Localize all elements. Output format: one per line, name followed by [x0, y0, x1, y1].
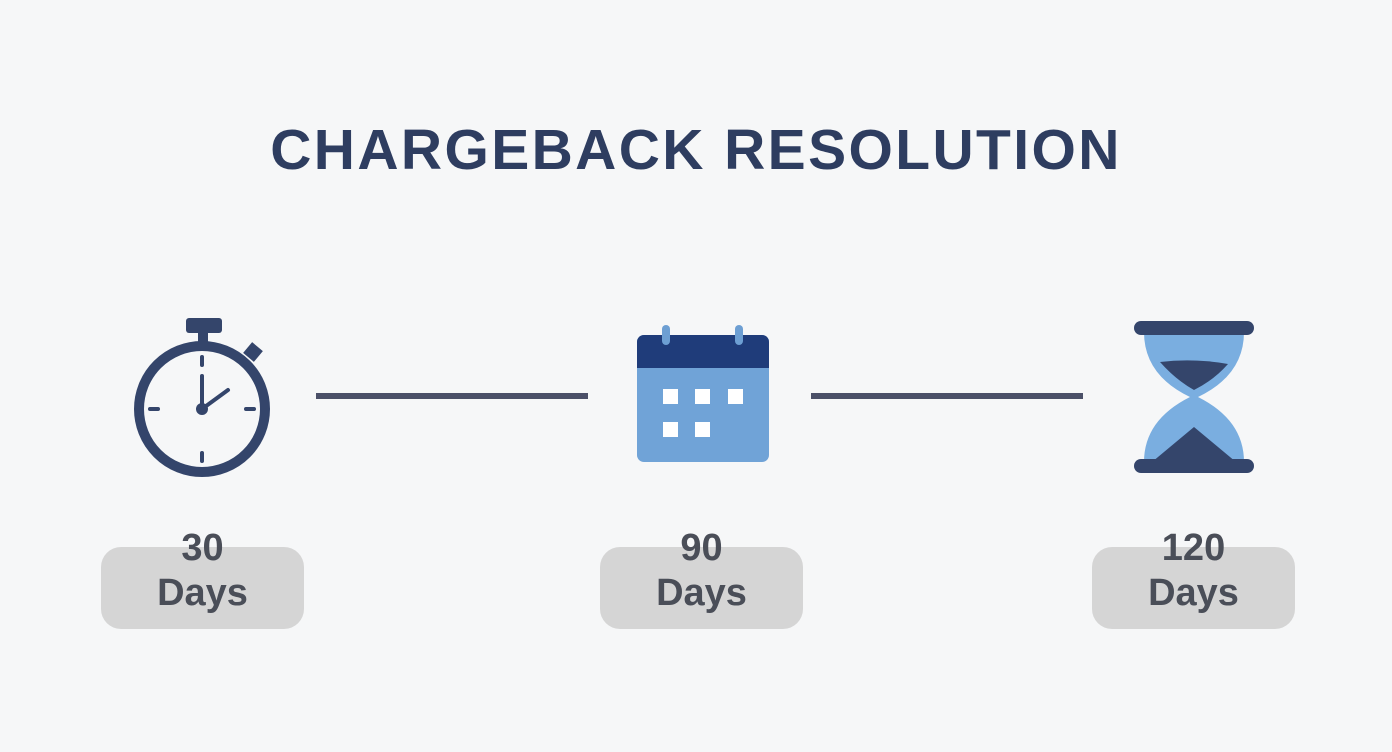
label: 120 days: 120	[1162, 527, 1225, 569]
label: 90 days: 90	[680, 527, 723, 569]
label: 30 days: 30	[181, 527, 224, 569]
icon: hourglass	[1134, 321, 1254, 473]
label: 120 days: Days	[1148, 572, 1239, 614]
pill: 90 days	[600, 547, 803, 629]
icon: stopwatch	[139, 318, 265, 472]
pill: 120 days	[1092, 547, 1295, 629]
label: 90 days: Days	[656, 572, 747, 614]
title: CHARGEBACK RESOLUTION	[270, 118, 1122, 182]
connector line 2	[811, 393, 1083, 399]
label: 30 days: Days	[157, 572, 248, 614]
label: 90 days	[656, 527, 747, 614]
pill: 30 days	[101, 547, 304, 629]
connector line 1	[316, 393, 588, 399]
icon: calendar	[637, 325, 769, 462]
label: 120 days	[1148, 527, 1239, 614]
label: 30 days	[157, 527, 248, 614]
